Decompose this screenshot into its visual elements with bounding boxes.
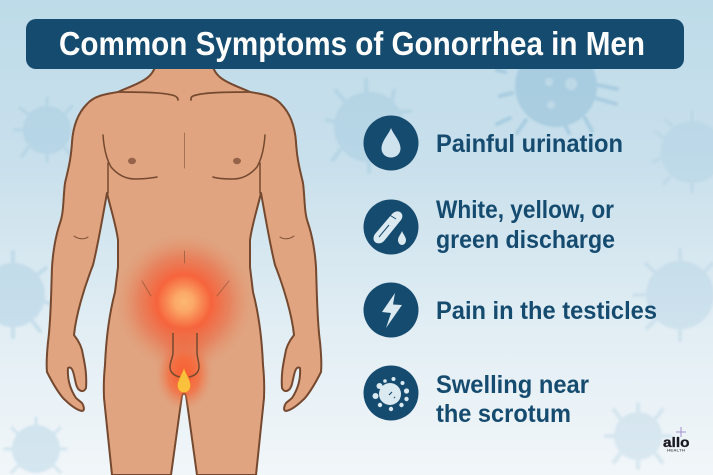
virus: bottom right bbox=[606, 404, 670, 468]
virus: middle bbox=[327, 80, 410, 172]
title banner bbox=[26, 19, 684, 69]
virus: right edge top bbox=[653, 112, 713, 192]
icon: water drop bbox=[364, 116, 418, 170]
symptom: discharge bbox=[364, 196, 615, 254]
label line 2: the scrotum bbox=[436, 400, 571, 428]
virus: left top bbox=[15, 98, 72, 161]
symptom: painful urination bbox=[364, 116, 623, 170]
symptom: testicle pain bbox=[364, 282, 657, 338]
title text: Common Symptoms of Gonorrhea in Men bbox=[59, 25, 645, 62]
body figure bbox=[47, 60, 321, 475]
icon: swelling bbox=[364, 366, 418, 420]
virus: bottom left bbox=[5, 418, 66, 473]
anatomical detail lines bbox=[74, 92, 294, 239]
symptom: swelling bbox=[364, 366, 589, 428]
label: White, yellow, or bbox=[436, 196, 614, 224]
label: Swelling near bbox=[436, 371, 589, 399]
icon: lightning bolt bbox=[364, 282, 418, 338]
body silhouette bbox=[47, 60, 321, 475]
logo: allo health bbox=[663, 427, 690, 452]
icon: discharge bbox=[364, 200, 418, 254]
virus: left middle bbox=[0, 252, 55, 337]
inflammation glow bbox=[124, 242, 244, 408]
faint groin and navel lines bbox=[142, 251, 229, 296]
label: Painful urination bbox=[436, 130, 623, 158]
nipples bbox=[128, 158, 241, 164]
virus: top center right bbox=[497, 30, 617, 133]
genital outline bbox=[170, 333, 199, 377]
label line 2: green discharge bbox=[436, 226, 615, 254]
label: Pain in the testicles bbox=[436, 297, 657, 325]
logo: allo health: HEALTH bbox=[667, 448, 686, 452]
virus: right middle bbox=[634, 250, 713, 340]
logo: allo health: allo bbox=[663, 435, 690, 450]
discharge drop bbox=[178, 368, 190, 392]
